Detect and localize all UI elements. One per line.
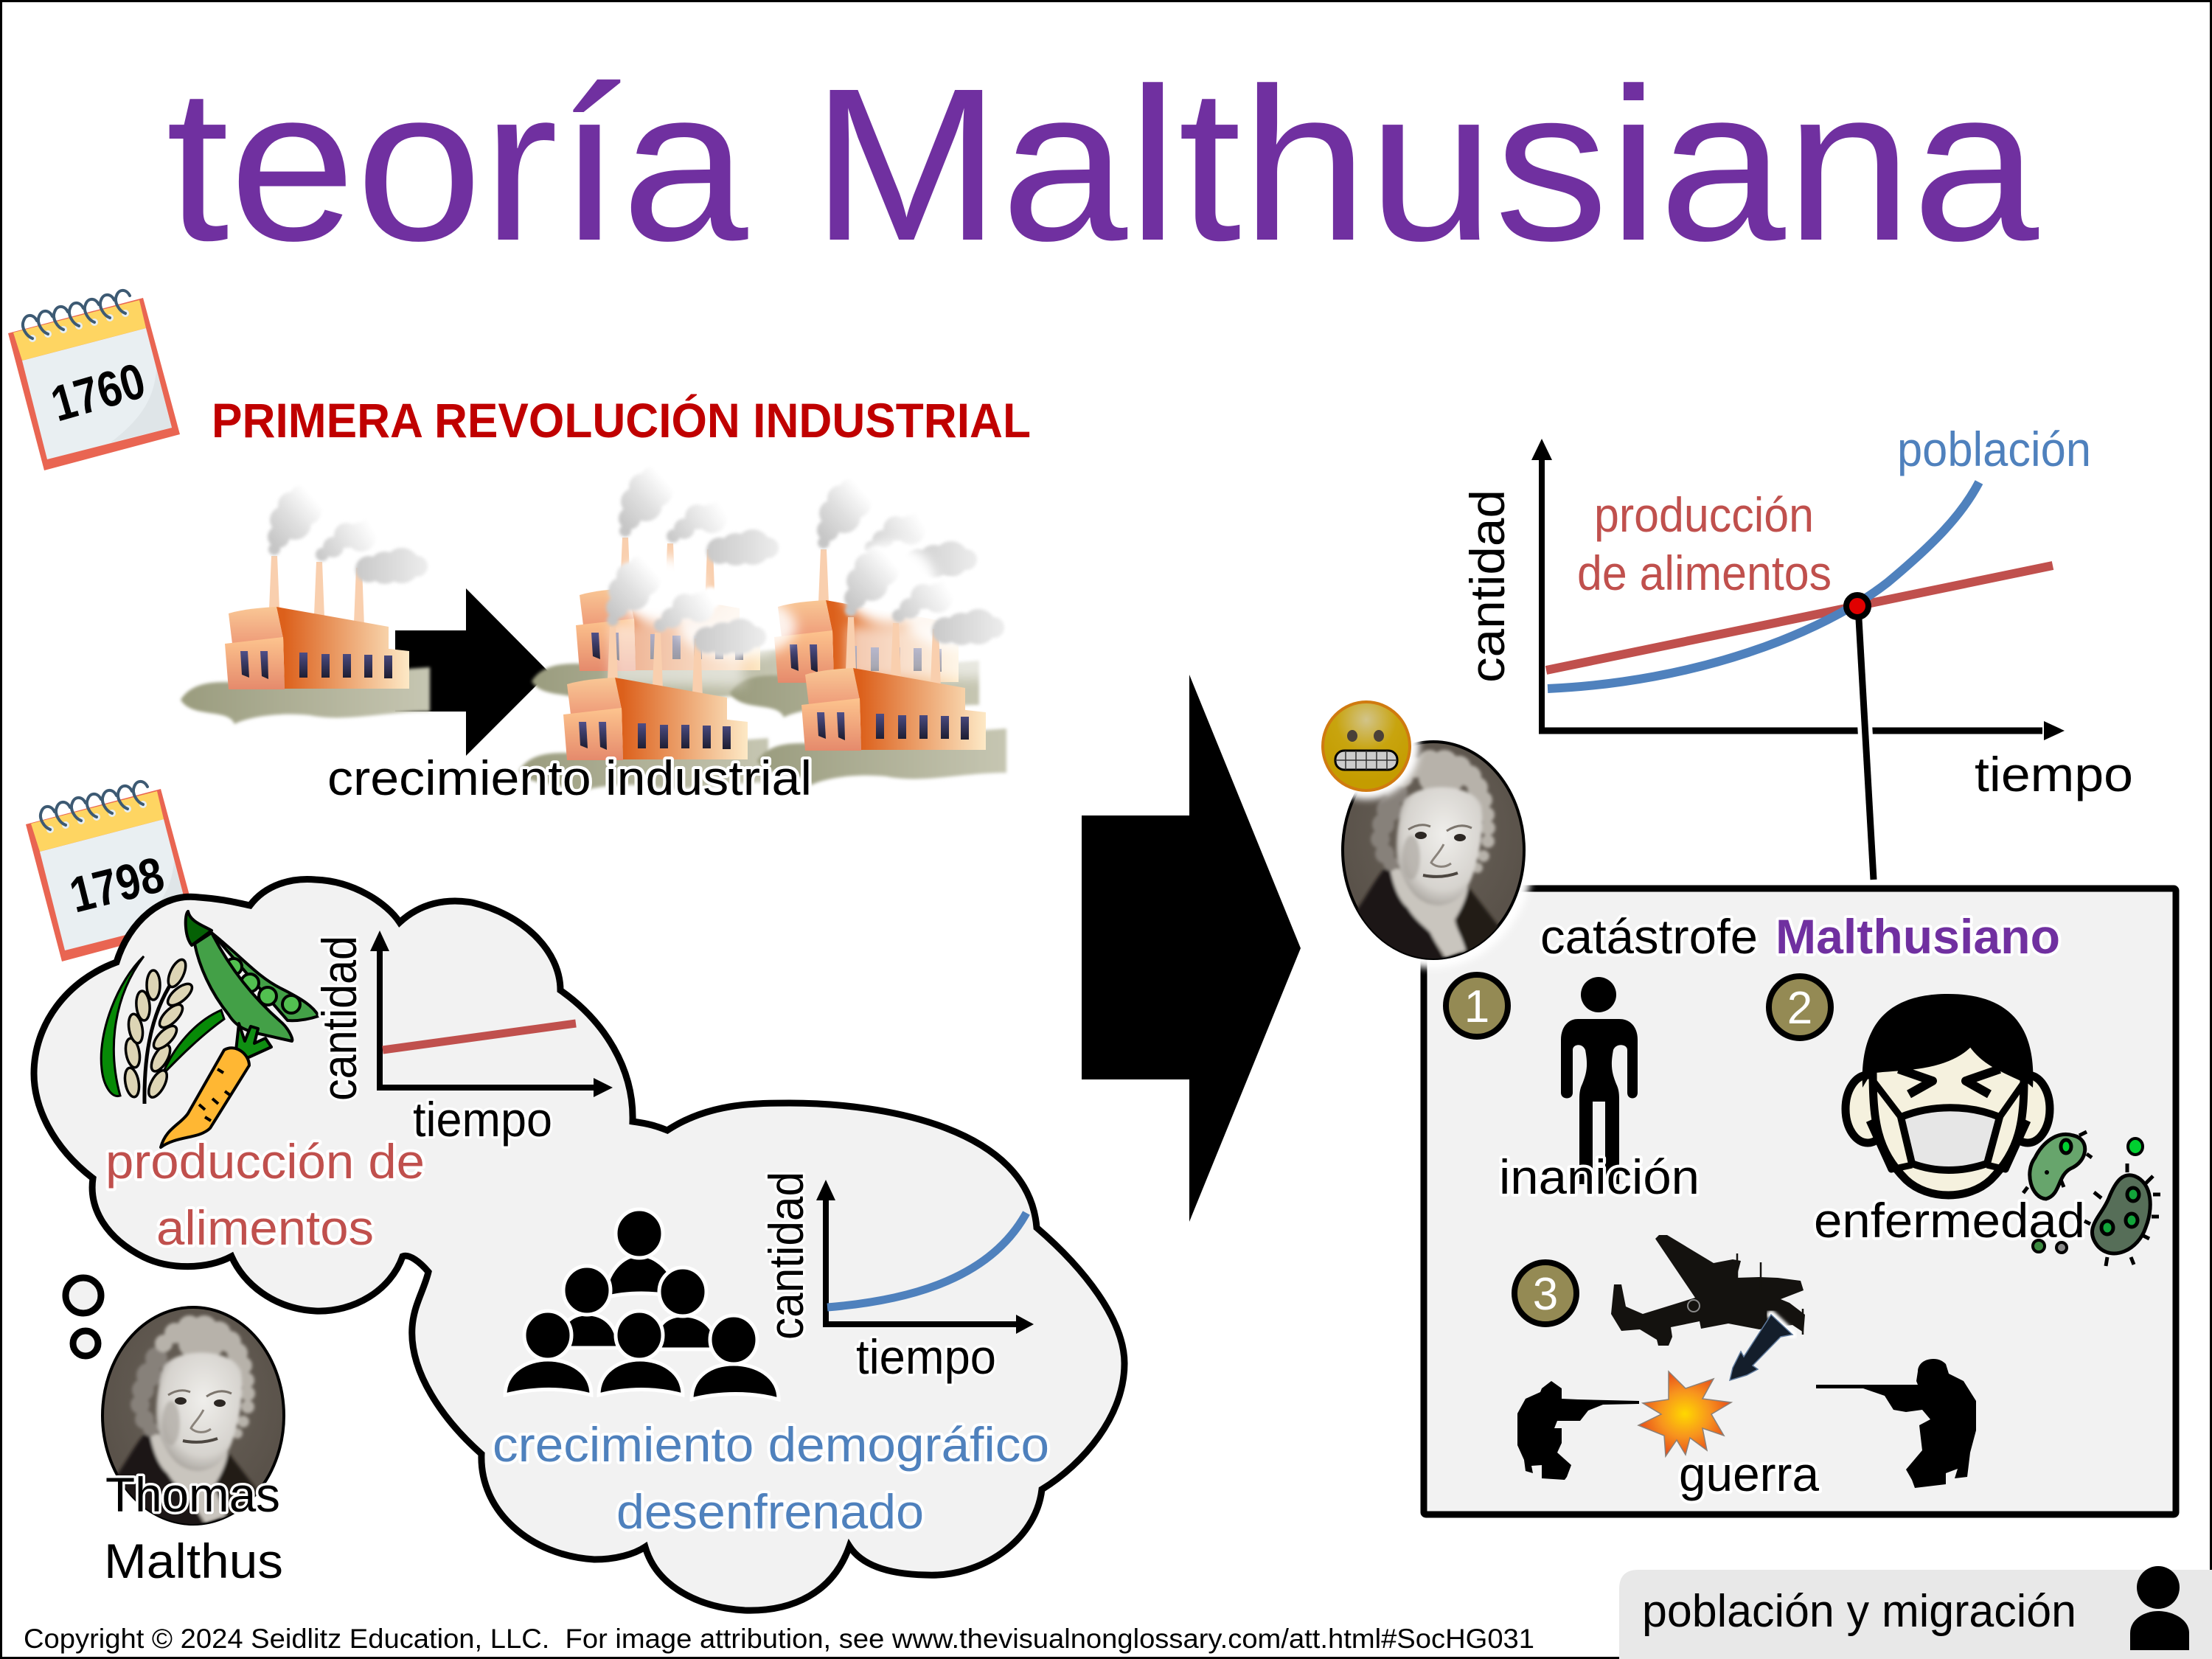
icon: small germ dots <box>2033 1138 2143 1253</box>
chart: population vs food production <box>1460 422 2133 880</box>
thought bubbles <box>66 1278 101 1356</box>
label: crecimiento industrial: crecimiento industrial <box>327 751 812 805</box>
icon: right soldier <box>1816 1359 1976 1488</box>
panel: Malthusian catastrophe <box>1424 888 2176 1514</box>
topic tag: población y migración <box>1642 1586 2076 1637</box>
icon: bomber plane <box>1611 1235 1805 1346</box>
thought cloud panel <box>34 879 1124 1610</box>
factory before <box>181 485 430 724</box>
chart: population growth <box>759 1172 1034 1384</box>
factories after <box>519 467 1010 795</box>
chart: population vs food production: producción <box>1594 487 1814 542</box>
icon: falling bomb <box>1730 1315 1792 1380</box>
calendar icon: 1760 <box>8 291 180 470</box>
label: Thomas Malthus: Thomas <box>105 1467 280 1522</box>
title: teoría Malthusiana <box>166 43 2040 286</box>
chart: population growth: tiempo <box>856 1329 996 1384</box>
chart: population vs food production: cantidad <box>1460 490 1514 683</box>
chart: food production: tiempo <box>413 1092 552 1147</box>
panel heading: Malthusiano: Malthusiano <box>1775 909 2060 964</box>
chart: food production <box>312 931 613 1147</box>
icon: grimacing emoji <box>1313 693 1419 799</box>
icon: population pyramid <box>505 1209 779 1399</box>
icon: small microbe <box>2023 1132 2092 1199</box>
heading: primera revolución industrial: PRIMERA REVOLUCIÓN INDUSTRIAL <box>212 393 1031 448</box>
big arrow <box>1082 675 1301 1222</box>
icon: wheat <box>101 956 224 1104</box>
label: inanición: inanición <box>1499 1150 1700 1204</box>
icon: masked sick person <box>1846 994 2050 1195</box>
icon: large microbe <box>2084 1164 2160 1266</box>
icon: left soldier <box>1517 1381 1639 1480</box>
icon: starving person <box>1561 977 1638 1184</box>
number badge 1: 1 <box>1464 981 1489 1032</box>
number badge 1 <box>1446 975 1508 1037</box>
label: crecimiento demográfico desenfrenado: crecimiento demográfico <box>493 1417 1049 1472</box>
label: Thomas Malthus: Malthus <box>104 1534 283 1588</box>
icon: pea pod <box>186 911 319 1041</box>
portrait halo and Malthus <box>1332 732 1534 968</box>
label: crecimiento demográfico desenfrenado: desenfrenado <box>616 1484 924 1539</box>
chart: population vs food production: tiempo <box>1975 747 2133 801</box>
copyright: Copyright © 2024 Seidlitz Education, LLC. For image attribution, see www.thevisualnonglossary.com/att.html#SocHG031 <box>24 1624 1534 1654</box>
calendar icon: 1798 <box>26 782 198 961</box>
topic tag <box>1619 1566 2212 1659</box>
arrow: industrial growth <box>395 588 549 756</box>
label: producción de alimentos: producción de <box>105 1134 425 1189</box>
chart: population vs food production: de alimentos <box>1577 546 1832 600</box>
calendar icon: 1760: 1760 <box>45 352 151 432</box>
label: producción de alimentos <box>105 1134 425 1255</box>
icon: carrot <box>161 1023 271 1147</box>
chart: population growth: cantidad <box>759 1172 813 1340</box>
calendar icon: 1798: 1798 <box>64 846 170 924</box>
number badge 2: 2 <box>1787 983 1812 1034</box>
chart: population vs food production: población <box>1897 422 2091 476</box>
number badge 3 <box>1514 1262 1576 1324</box>
number badge 2 <box>1769 976 1831 1038</box>
label: enfermedad: enfermedad <box>1814 1193 2085 1248</box>
portrait: Thomas Malthus <box>102 1307 284 1530</box>
label: crecimiento demográfico desenfrenado <box>493 1417 1049 1539</box>
chart: food production: cantidad <box>312 936 366 1101</box>
icon: explosion <box>1638 1371 1731 1456</box>
label: Thomas Malthus <box>104 1467 283 1588</box>
label: producción de alimentos: alimentos <box>156 1200 374 1255</box>
panel heading: catástrofe <box>1540 909 1758 964</box>
label: guerra: guerra <box>1679 1447 1819 1501</box>
number badge 3: 3 <box>1533 1269 1558 1320</box>
